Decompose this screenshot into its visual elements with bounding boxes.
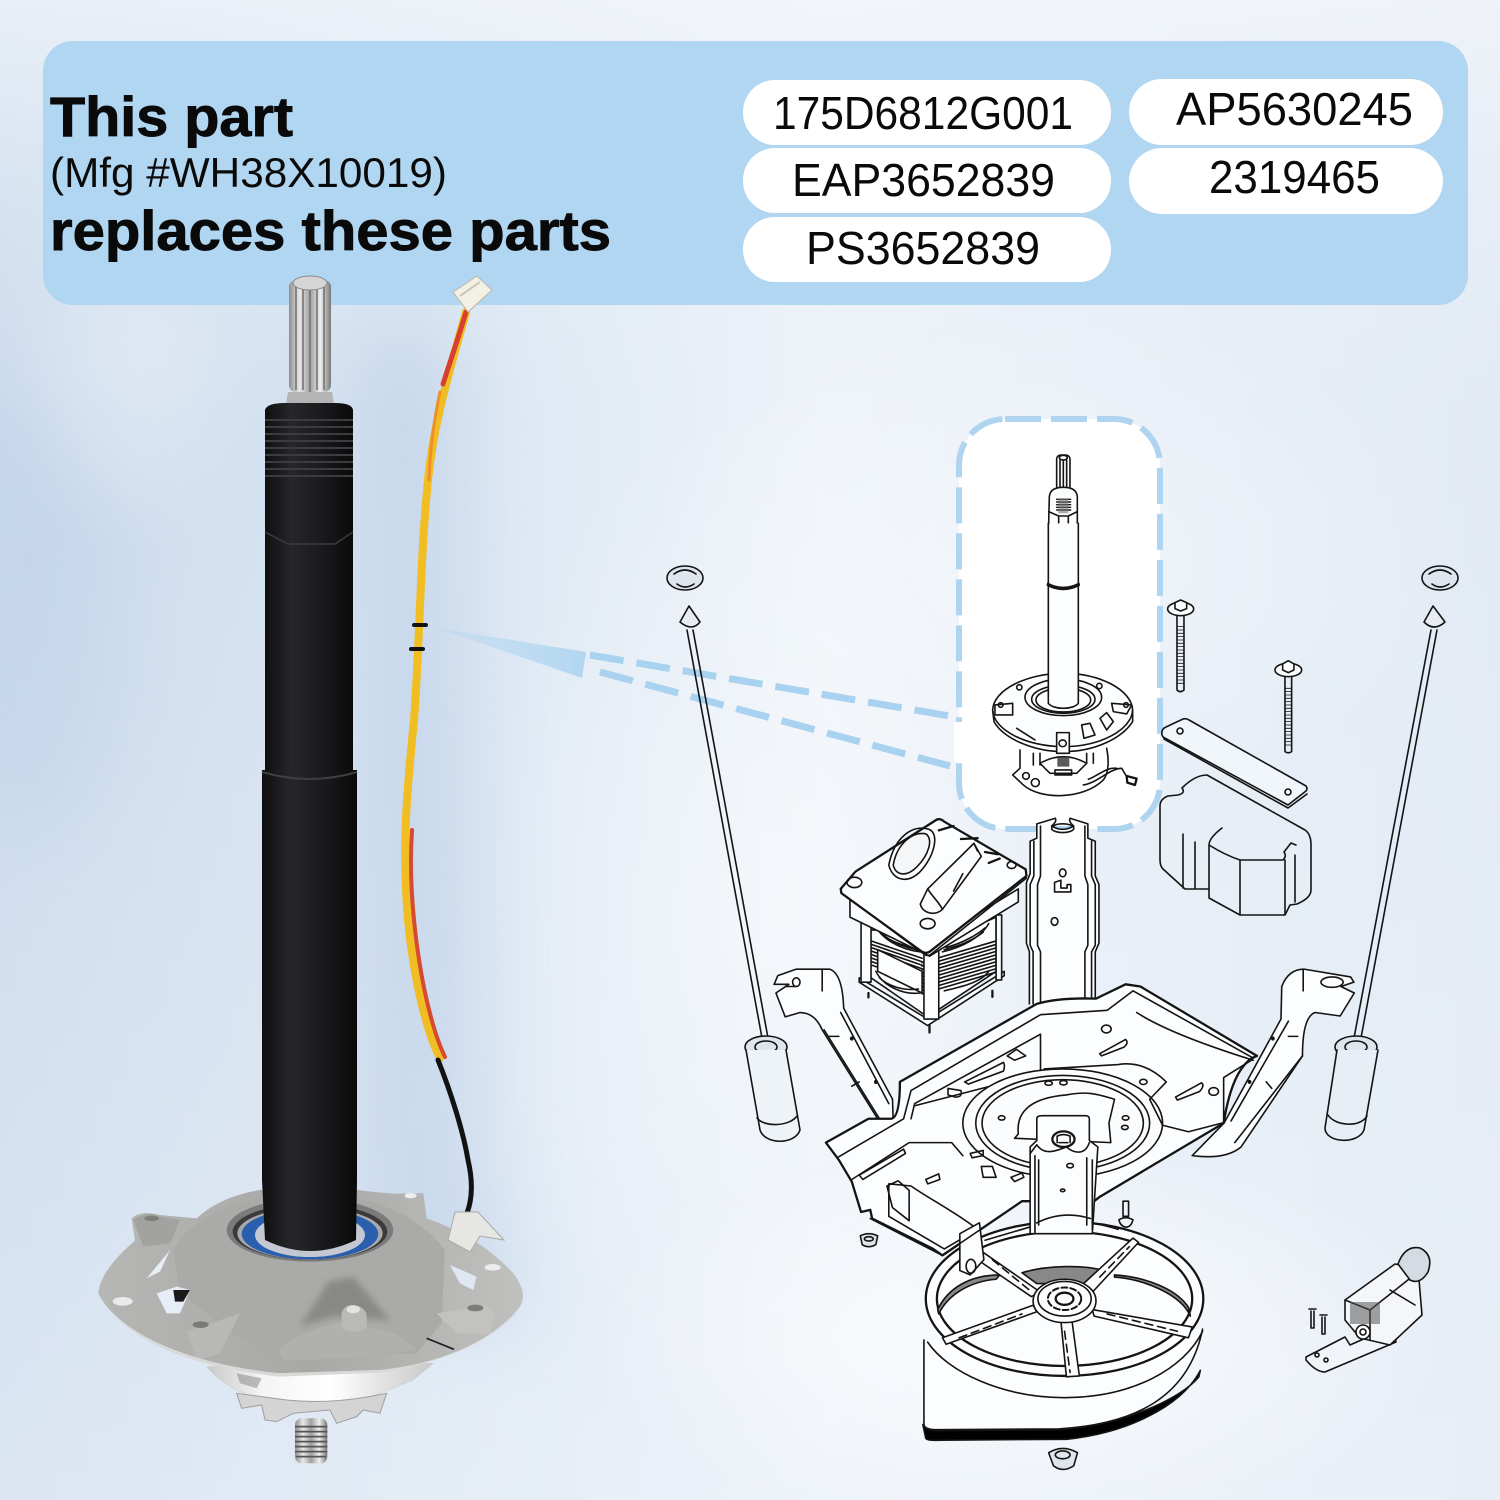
flange holes xyxy=(157,1287,190,1313)
header panel xyxy=(43,41,1468,305)
bolts xyxy=(1168,600,1302,753)
exploded parts diagram xyxy=(667,419,1458,1469)
motor xyxy=(841,819,1026,1032)
part number pill 175D6812G001: 175D6812G001 xyxy=(773,87,1073,139)
heading: replaces these parts: replaces these parts xyxy=(50,199,611,262)
left suspension rod xyxy=(667,566,800,1141)
splined shaft tip xyxy=(285,276,335,410)
part number pill PS3652839 xyxy=(743,217,1111,282)
cast flange with bearing xyxy=(98,1190,523,1463)
small nuts and screw xyxy=(860,1201,1133,1469)
part number pill 2319465: 2319465 xyxy=(1209,151,1380,203)
part number pill 2319465 xyxy=(1129,148,1443,214)
product photo: shaft and flange assembly xyxy=(98,276,523,1463)
part number pill EAP3652839 xyxy=(743,148,1111,213)
vertical bracket xyxy=(1026,818,1099,1004)
motor pulley wheel xyxy=(923,1201,1203,1440)
foam block xyxy=(1160,775,1311,915)
text: manufacturer number: (Mfg #WH38X10019) xyxy=(50,149,447,196)
part number pill AP5630245 xyxy=(1129,79,1443,145)
part number pill PS3652839: PS3652839 xyxy=(806,222,1040,274)
rear bracket xyxy=(1030,1116,1098,1234)
black tube, lower section xyxy=(262,770,357,1251)
black tube, upper section xyxy=(265,403,353,770)
dashed highlight box xyxy=(954,419,1160,829)
wiring harness xyxy=(405,312,471,1238)
part number pill AP5630245: AP5630245 xyxy=(1176,83,1413,135)
water pump assembly xyxy=(1306,1248,1430,1372)
mounting plate xyxy=(1162,719,1307,808)
side arms xyxy=(774,969,1354,1157)
wire connector xyxy=(453,276,492,312)
cable tie xyxy=(448,1212,504,1252)
callout beam linking photo to diagram xyxy=(437,628,950,766)
highlighted shaft line drawing xyxy=(993,455,1137,796)
right suspension rod xyxy=(1325,566,1458,1140)
washer base frame xyxy=(826,984,1257,1255)
heading: this part: This part xyxy=(50,85,293,148)
part number pill EAP3652839: EAP3652839 xyxy=(792,154,1055,206)
